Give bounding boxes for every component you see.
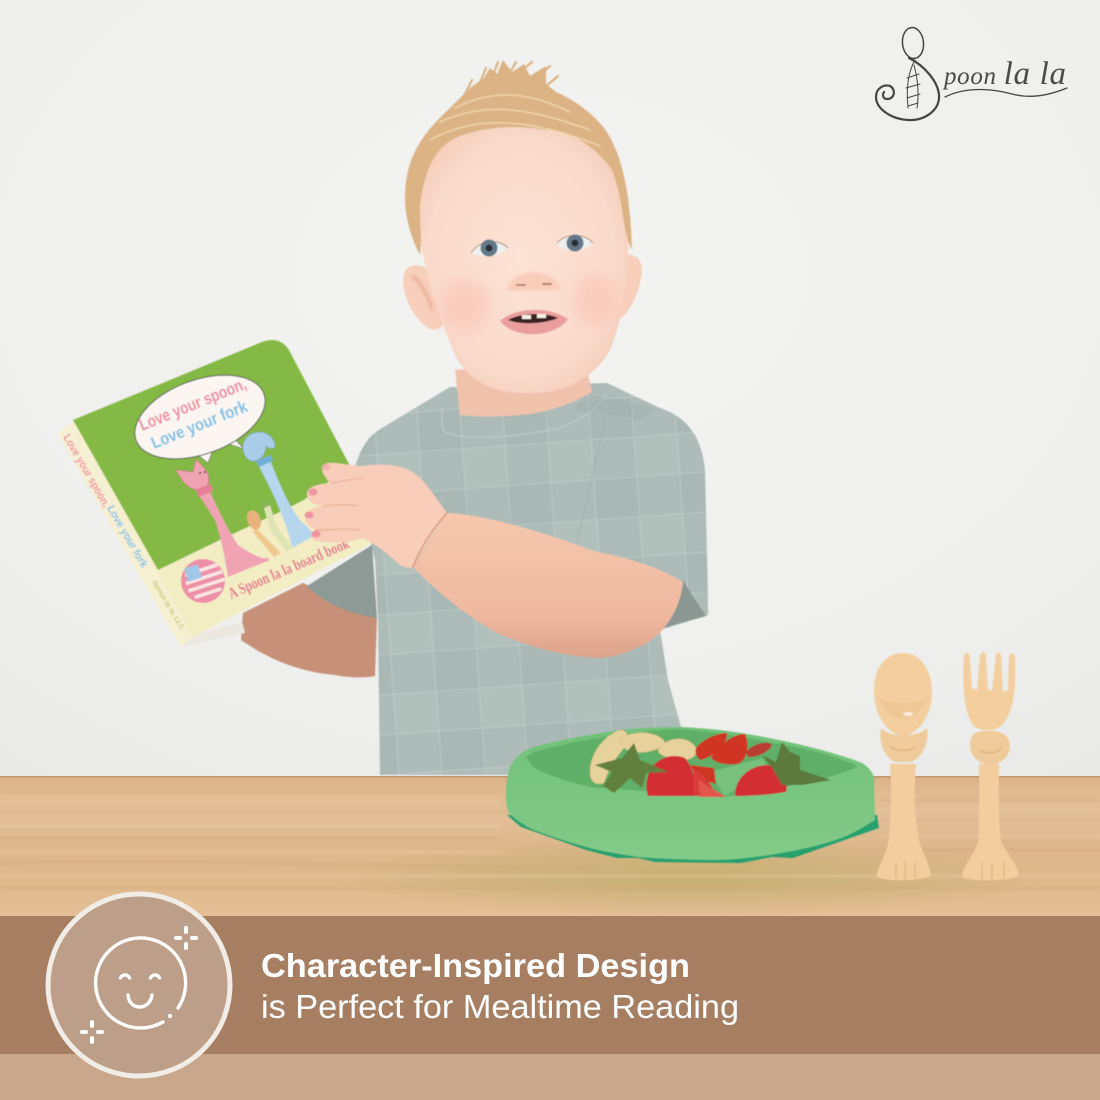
spine title [60,432,185,631]
book spoon and fork [244,502,293,557]
speech bubble [123,359,277,475]
icon badge: smiling face [48,894,230,1076]
caption subheading: is Perfect for Mealtime Reading [261,988,739,1025]
boy: neck [455,360,592,417]
book [58,340,372,647]
speech bubble: Love your fork [148,397,250,453]
eyes [471,242,508,256]
wooden table [0,776,1100,918]
book subtitle: A Spoon la la board book [226,535,352,603]
food: strawberry right [735,742,831,796]
spine title: Love your spoon, [60,432,112,510]
caption heading: Character-Inspired Design [261,947,690,984]
plate divider wall [710,758,770,796]
plate body [506,727,875,860]
cat [176,459,270,577]
book cover [73,340,372,637]
spoon [874,653,932,880]
mouth [500,310,568,334]
logo: Spoon la la [876,26,1067,120]
suction plate [506,727,879,863]
boy: hair [405,60,632,255]
boy: t-shirt [307,383,708,775]
logo: Spoon la la: poon la la [942,56,1066,92]
speech bubble: Love your spoon, [136,374,249,435]
book spine [58,420,195,647]
boy: face [414,122,628,393]
boy: near arm [413,513,683,658]
background wall [0,0,1100,780]
book pages [183,622,245,646]
caption band [0,916,1100,1100]
spine title: Spoon la la, LLC [150,579,185,631]
flag badge [181,559,227,603]
food: bananas [590,730,696,784]
fork [962,652,1019,880]
boy: far arm [241,583,377,677]
plate base [507,815,879,863]
nose [508,272,560,291]
plate inner well [526,729,856,797]
dog [243,432,314,548]
boy: ears [403,255,642,330]
food: cherry tomatoes [690,733,772,784]
spine title: Love your fork [104,504,150,571]
boy: hand [304,463,447,568]
cover green panel [73,340,350,570]
food: strawberry left [595,743,726,797]
